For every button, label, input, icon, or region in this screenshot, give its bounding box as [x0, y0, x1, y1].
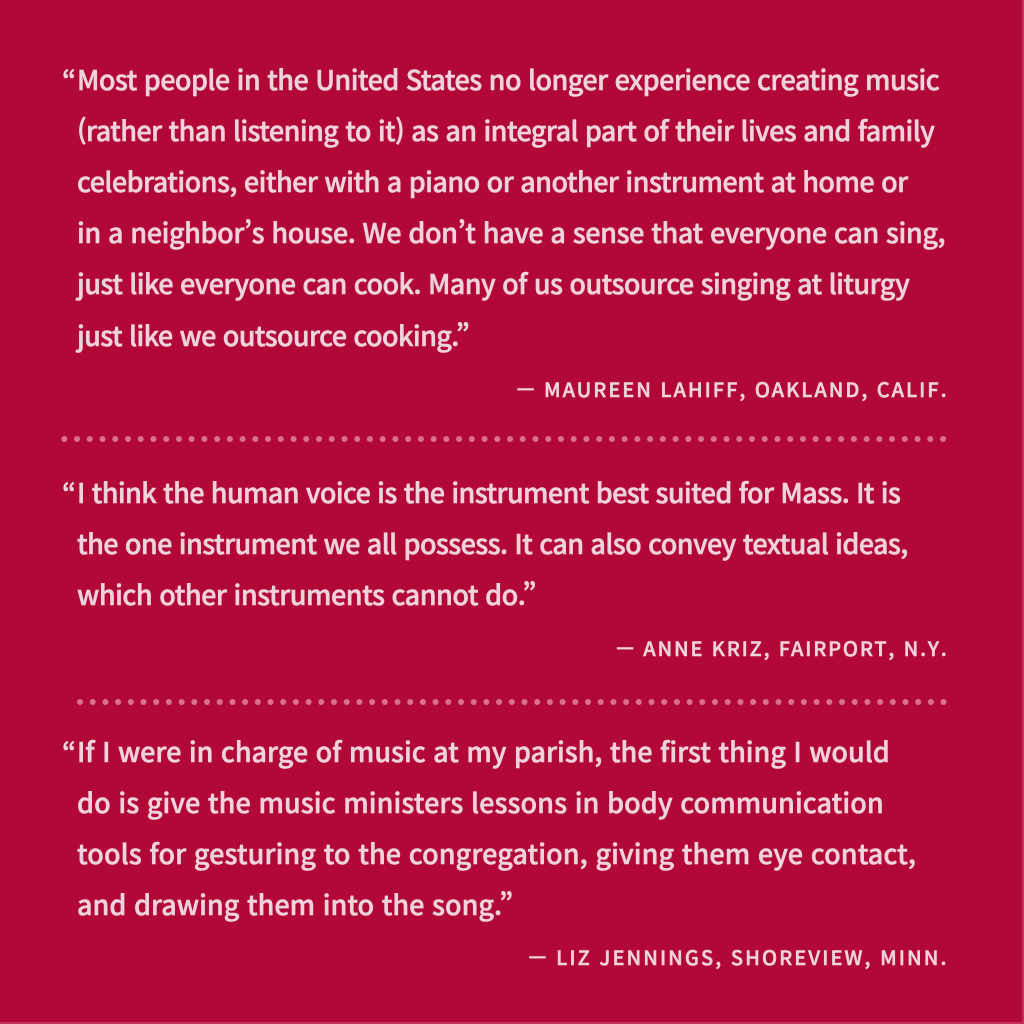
- quote 3 text: do is give the music ministers lessons in body communication: [77, 782, 884, 821]
- quote 2 text: which other instruments cannot do.”: [77, 574, 536, 613]
- quote 1 text: (rather than listening to it) as an integral part of their lives and family: [77, 110, 934, 149]
- quote 3 text: [77, 731, 916, 923]
- quote 3 text: and drawing them into the song.”: [77, 884, 513, 923]
- opening quote mark: “: [62, 731, 76, 770]
- panel: quote 3: [62, 731, 948, 971]
- quote 1 text: celebrations, either with a piano or another instrument at home or: [77, 161, 908, 200]
- divider 1: [61, 436, 946, 442]
- attribution 3: — LIZ JENNINGS, SHOREVIEW, MINN.: [529, 942, 948, 971]
- quote 1 text: in a neighbor’s house. We don’t have a sense that everyone can sing,: [77, 212, 945, 251]
- divider 2: [77, 699, 947, 705]
- quote 1 text: just like we outsource cooking.”: [77, 315, 469, 354]
- quote 3 text: If I were in charge of music at my parish, the first thing I would: [77, 731, 890, 770]
- quote 1 text: [75, 59, 945, 354]
- opening quote mark: “: [62, 59, 76, 98]
- quote 1 text: Most people in the United States no longer experience creating music: [77, 59, 939, 98]
- quote 2 text: the one instrument we all possess. It can also convey textual ideas,: [77, 523, 908, 562]
- panel: quote 1: [62, 59, 948, 403]
- panel: quote 2: [62, 472, 948, 662]
- quote 3 text: tools for gesturing to the congregation, giving them eye contact,: [77, 833, 916, 872]
- quote 1 text: just like everyone can cook. Many of us outsource singing at liturgy: [77, 263, 909, 302]
- quote 2 text: I think the human voice is the instrument best suited for Mass. It is: [77, 472, 900, 511]
- quote 2 text: [77, 472, 908, 613]
- attribution 2: — ANNE KRIZ, FAIRPORT, N.Y.: [616, 633, 948, 662]
- attribution 1: — MAUREEN LAHIFF, OAKLAND, CALIF.: [517, 374, 948, 403]
- opening quote mark: “: [62, 472, 76, 511]
